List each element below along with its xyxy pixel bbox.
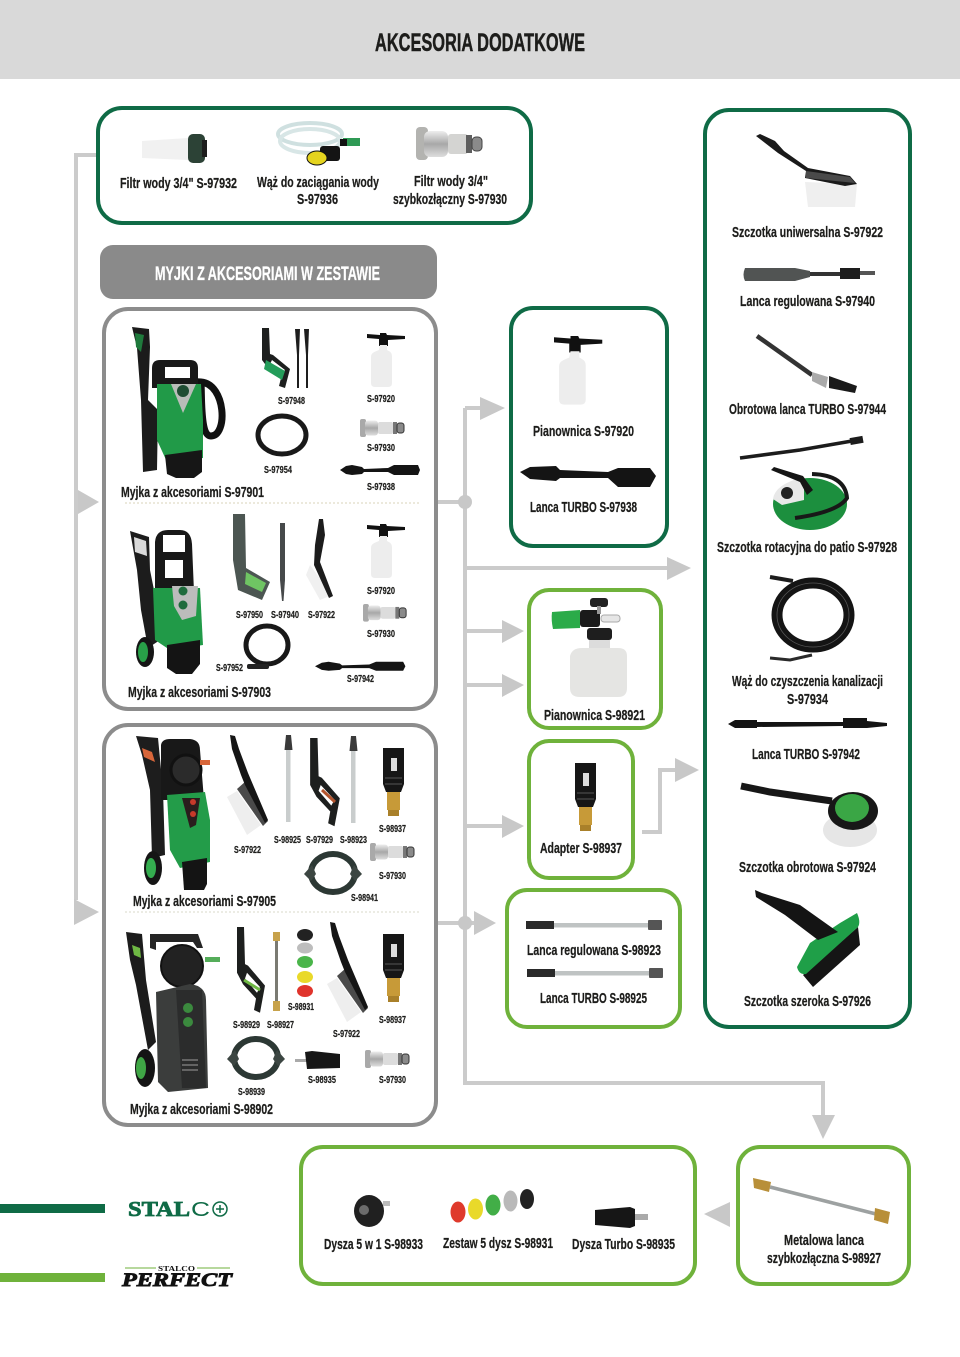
- accessory gun set S-97948: [262, 328, 309, 388]
- icon: foam cannon: [552, 598, 627, 697]
- icon: nozzle set: [450, 1189, 534, 1222]
- icon: turbo lance: [520, 466, 656, 487]
- brush S-97922: [227, 735, 268, 835]
- part numbers: S-97950: [236, 610, 263, 621]
- label: Pianownica S-98921: [544, 707, 645, 724]
- hose S-97954: [258, 416, 306, 454]
- label: quick filter: Filtr wody 3/4": [414, 173, 488, 190]
- hose S-98939: [227, 1039, 285, 1077]
- label: suction hose: Wąż do zaciągania wody: [257, 174, 379, 191]
- accessory foam bottle: [367, 333, 405, 387]
- logo: Stalco Perfect: [121, 1265, 234, 1291]
- logo: Stalco: C: [191, 1199, 210, 1221]
- label: Lanca regulowana S-97940: [740, 293, 875, 310]
- part numbers: S-97930: [379, 871, 406, 882]
- label: Adapter S-98937: [540, 840, 622, 857]
- part numbers: [264, 394, 395, 493]
- panel: adapter: [529, 741, 633, 878]
- part numbers: S-98931: [288, 1002, 314, 1013]
- quick coupling: [363, 604, 406, 622]
- part numbers: S-97948: [278, 396, 305, 407]
- nozzle set S-98931: [297, 929, 313, 997]
- brand bar: Perfect: [0, 1273, 105, 1282]
- icon: wide brush: [755, 890, 860, 987]
- part numbers: S-97920: [367, 394, 395, 405]
- label: suction hose: [257, 174, 379, 208]
- logo: Stalco Perfect: PERFECT: [121, 1270, 234, 1291]
- label: quick filter: szybkozłączny S-97930: [393, 191, 507, 208]
- panel: right accessories: [705, 110, 910, 1027]
- icon: 5 in 1 nozzle: [354, 1195, 390, 1227]
- icon: lance S-98923: [526, 920, 662, 930]
- grey heading: [100, 245, 437, 299]
- panel: washers 97901 and 97903: [104, 309, 436, 709]
- label: Lanca TURBO S-98925: [540, 990, 647, 1007]
- part numbers: S-98937: [379, 1015, 406, 1026]
- logo: Stalco Perfect: STALCO: [158, 1265, 196, 1273]
- label: Myjka z akcesoriami S-97901: [121, 484, 264, 501]
- part numbers: [216, 586, 395, 685]
- part numbers: S-98925: [274, 835, 301, 846]
- lance S-97940 small: [280, 523, 285, 601]
- part numbers: S-97922: [308, 610, 335, 621]
- title: AKCESORIA DODATKOWE: [375, 29, 585, 57]
- grey heading: MYJKI Z AKCESORIAMI W ZESTAWIE: [155, 264, 380, 285]
- labels: Zestaw 5 dysz S-98931: [443, 1235, 553, 1252]
- icon: suction hose: [278, 123, 360, 165]
- label: suction hose: S-97936: [297, 191, 338, 208]
- icon: lance S-98925: [527, 968, 663, 978]
- panel: foam S-98921: [529, 590, 661, 728]
- label: [732, 673, 883, 708]
- part numbers: S-98929: [233, 1020, 260, 1031]
- icon: rotating turbo lance: [757, 336, 857, 393]
- gun S-98929: [237, 927, 265, 1013]
- part numbers: [233, 1002, 406, 1098]
- turbo lance: [340, 465, 420, 475]
- icon: rotary brush: [741, 786, 878, 847]
- adapter S-98937: [383, 934, 404, 1002]
- part numbers: S-98937: [379, 824, 406, 835]
- panel: foam lance and turbo: [511, 308, 667, 546]
- label: Lanca TURBO S-97942: [752, 746, 860, 763]
- part numbers: S-98927: [267, 1020, 294, 1031]
- metal lance S-98927: [273, 932, 280, 1011]
- icon: foam bottle: [554, 336, 602, 405]
- brush S-97922 small: [306, 519, 333, 600]
- washer S-97905: [136, 736, 210, 890]
- hose S-97952: [246, 626, 288, 669]
- panel: grey lances: [507, 890, 680, 1027]
- logo: Stalco: [128, 1197, 227, 1221]
- part numbers: S-97940: [271, 610, 299, 621]
- hose S-98941: [304, 854, 362, 892]
- part numbers: S-97954: [264, 465, 292, 476]
- label: quick filter: [393, 173, 507, 208]
- part numbers: [234, 824, 406, 904]
- panel: nozzles: [301, 1147, 695, 1284]
- connector: adapter to right panel: [642, 758, 699, 832]
- icon: universal brush: [756, 134, 857, 207]
- labels: Dysza Turbo S-98935: [572, 1236, 675, 1253]
- panel: water accessories: [98, 108, 531, 223]
- label: Myjka z akcesoriami S-98902: [130, 1101, 273, 1118]
- panel: washers 97905 and 98902: [104, 725, 436, 1125]
- label: Lanca TURBO S-97938: [530, 499, 637, 516]
- label: Szczotka szeroka S-97926: [744, 993, 871, 1010]
- part numbers: S-97922: [333, 1029, 360, 1040]
- label: Myjka z akcesoriami S-97905: [133, 893, 276, 910]
- part numbers: S-97930: [367, 443, 395, 454]
- icon: turbo lance: [728, 718, 887, 728]
- gun S-97929: [310, 738, 340, 826]
- labels: [324, 1235, 675, 1253]
- foam bottle: [367, 524, 405, 578]
- icon: metal lance: [753, 1178, 890, 1224]
- quick coupling: [360, 419, 404, 437]
- part numbers: S-97929: [306, 835, 333, 846]
- icon: patio brush: [740, 436, 864, 530]
- adapter S-98937: [383, 748, 404, 816]
- part numbers: S-97938: [367, 482, 395, 493]
- brush S-97922: [327, 922, 368, 1022]
- quick coupling: [370, 843, 414, 861]
- quick coupling: [365, 1050, 409, 1068]
- part numbers: S-97922: [234, 845, 261, 856]
- icon: adjustable lance: [744, 268, 875, 281]
- lance S-98925: [284, 735, 292, 822]
- label: Metalowa lanca: [784, 1232, 864, 1249]
- label: Lanca regulowana S-98923: [527, 942, 661, 959]
- label: filter: Filtr wody 3/4" S-97932: [120, 175, 237, 192]
- washer S-97903: [130, 530, 203, 674]
- label: Szczotka obrotowa S-97924: [739, 859, 876, 876]
- label: Obrotowa lanca TURBO S-97944: [729, 401, 886, 418]
- connectors: left grey line and arrows: [74, 155, 99, 925]
- label: Pianownica S-97920: [533, 423, 634, 440]
- washer S-98902: [126, 932, 220, 1092]
- label: Wąż do czyszczenia kanalizacji: [732, 673, 883, 690]
- icon: quick filter: [416, 127, 482, 160]
- label: Szczotka uniwersalna S-97922: [732, 224, 883, 241]
- connectors: central grey tree and arrows: [437, 397, 835, 1139]
- panel: metal lance: [738, 1147, 909, 1284]
- label: S-97934: [787, 691, 828, 708]
- lance S-98923: [350, 736, 358, 823]
- label: Myjka z akcesoriami S-97903: [128, 684, 271, 701]
- part numbers: S-98939: [238, 1087, 265, 1098]
- label: szybkozłączna S-98927: [767, 1250, 881, 1267]
- logo: Stalco: STAL: [128, 1197, 190, 1221]
- icon: water filter: [142, 134, 207, 163]
- connector: left arrow between bottom panels: [704, 1202, 730, 1227]
- labels: Dysza 5 w 1 S-98933: [324, 1236, 423, 1253]
- gun S-97950: [233, 514, 270, 600]
- part numbers: S-98923: [340, 835, 367, 846]
- part numbers: S-98935: [308, 1075, 336, 1086]
- label: [767, 1232, 881, 1267]
- part numbers: S-97920: [367, 586, 395, 597]
- icon: turbo nozzle: [595, 1207, 648, 1228]
- icon: adapter: [575, 763, 596, 831]
- part numbers: S-97930: [379, 1075, 406, 1086]
- washer S-97901: [132, 327, 222, 478]
- part numbers: S-97942: [347, 674, 374, 685]
- part numbers: S-97930: [367, 629, 395, 640]
- turbo nozzle S-98935: [295, 1051, 340, 1069]
- part numbers: S-98941: [351, 893, 378, 904]
- part numbers: S-97952: [216, 663, 243, 674]
- brand bar: Stalco: [0, 1204, 105, 1213]
- header band: [0, 0, 960, 79]
- turbo lance S-97942: [315, 662, 405, 671]
- icon: sewer hose: [770, 577, 849, 660]
